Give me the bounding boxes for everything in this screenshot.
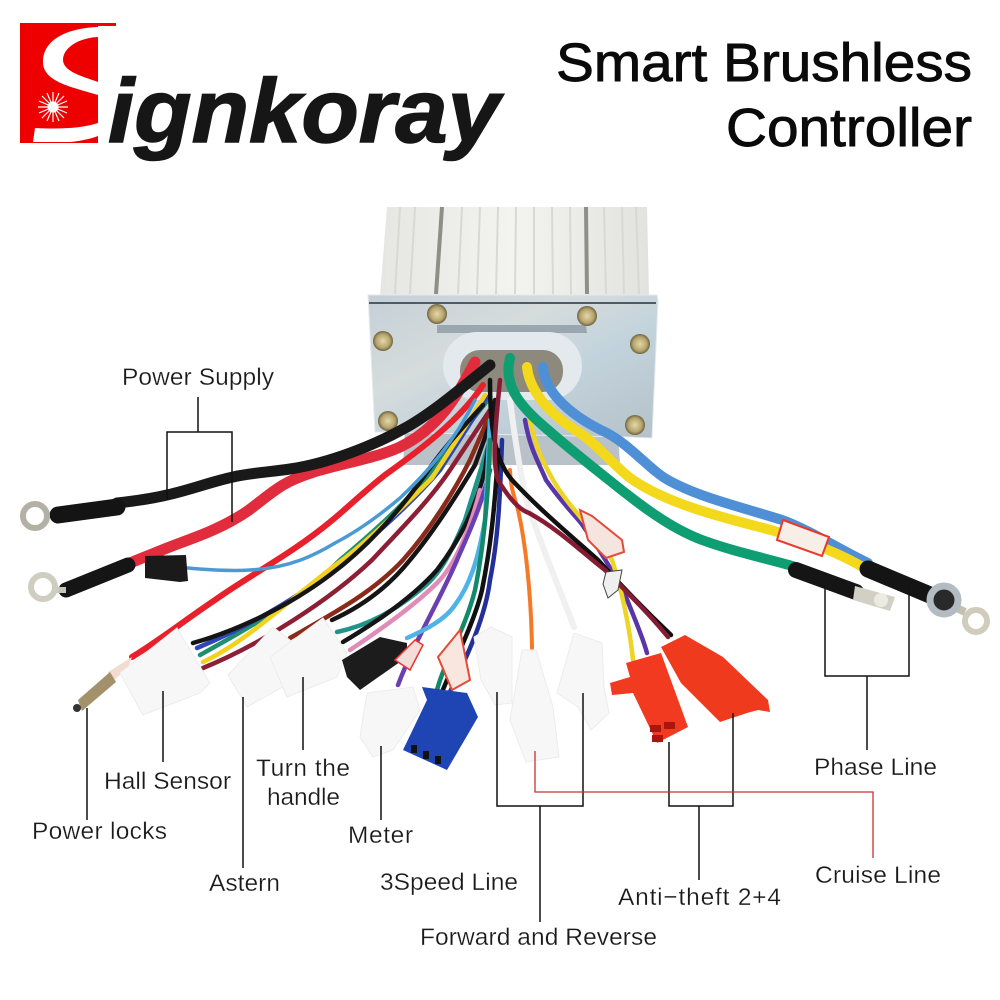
label: Anti-theft 2+4: Anti−theft 2+4 (618, 884, 781, 911)
wire: thin red to power lock (132, 385, 483, 657)
logo: Signkoray (20, 23, 504, 162)
logo mark: red S block with star (20, 23, 116, 143)
phase cables (508, 358, 987, 632)
power supply cables (23, 362, 490, 599)
title: Controller (726, 98, 972, 158)
label: Power locks (32, 708, 167, 845)
label: Forward and Reverse (420, 692, 657, 951)
wire: 3 speed bundle (437, 440, 502, 692)
controller housing (368, 207, 658, 465)
label: Power locks: Power locks (32, 818, 167, 845)
wire markers and ties (438, 510, 624, 690)
label: Turn the handle: Turn the (256, 755, 350, 782)
cable: red power (31, 362, 475, 599)
anti-theft marker (580, 510, 624, 558)
aluminium body with ribs (380, 207, 649, 295)
connector: small black blue-wire plug (145, 555, 188, 582)
cable: green phase (508, 358, 796, 567)
logo wordmark: ignkoray (108, 62, 504, 162)
power lock terminal (73, 657, 132, 712)
label: Hall Sensor: Hall Sensor (104, 768, 231, 795)
label: Cruise Line: Cruise Line (815, 862, 941, 889)
label: Phase Line (814, 585, 937, 781)
connector: black power lock plug (342, 637, 407, 690)
label: Hall Sensor (104, 691, 231, 795)
label: Astern: Astern (209, 870, 280, 897)
tie (603, 570, 622, 598)
phase wire marker (777, 520, 829, 556)
cable: yellow phase (527, 367, 866, 569)
connector: red anti-theft 2-pin (661, 635, 770, 722)
label: Phase Line: Phase Line (814, 754, 937, 781)
label: Cruise Line (535, 751, 941, 889)
thin signal wires (132, 380, 671, 692)
connector: cruise (510, 650, 559, 762)
mounting screws (373, 304, 650, 435)
wires: anti-theft bundle (490, 380, 671, 660)
connector: forward and reverse (557, 633, 609, 730)
label: Meter (348, 746, 413, 849)
title (556, 33, 972, 158)
connector: astern (228, 627, 300, 707)
wire: white (510, 400, 574, 627)
label: Turn the handle (256, 677, 350, 811)
label: Forward and Reverse: Forward and Reverse (420, 924, 657, 951)
rubber grommet (443, 332, 582, 400)
end plate (368, 295, 658, 438)
label: Meter: Meter (348, 822, 413, 849)
connector: red anti-theft 4-pin (610, 653, 688, 743)
wire: hall sensor bundle (193, 395, 490, 668)
connector: meter (360, 687, 420, 757)
cable: black power (23, 365, 490, 528)
connector: three-speed (474, 627, 512, 705)
label: Anti-theft 2+4 (618, 713, 781, 911)
connector: turn the handle (270, 618, 347, 697)
title: Smart Brushless (556, 33, 972, 93)
phase heat-shrink and lugs (796, 569, 987, 632)
label: Turn the handle: handle (267, 784, 340, 811)
wire: orange cruise (510, 470, 532, 648)
label: Power Supply: Power Supply (122, 364, 275, 391)
label: Power Supply (122, 364, 275, 522)
connector: pink tag (395, 640, 423, 670)
connector: hall sensor (120, 628, 210, 715)
cable: blue phase (543, 367, 868, 563)
wire: handle and astern bundle (290, 400, 495, 685)
plate slot (437, 325, 587, 333)
label: 3Speed Line: 3Speed Line (380, 869, 518, 896)
wire: thin blue to small connector (188, 400, 475, 570)
lower mounting flange (403, 430, 620, 465)
connector: blue (403, 687, 478, 770)
3 speed label band (438, 630, 470, 690)
